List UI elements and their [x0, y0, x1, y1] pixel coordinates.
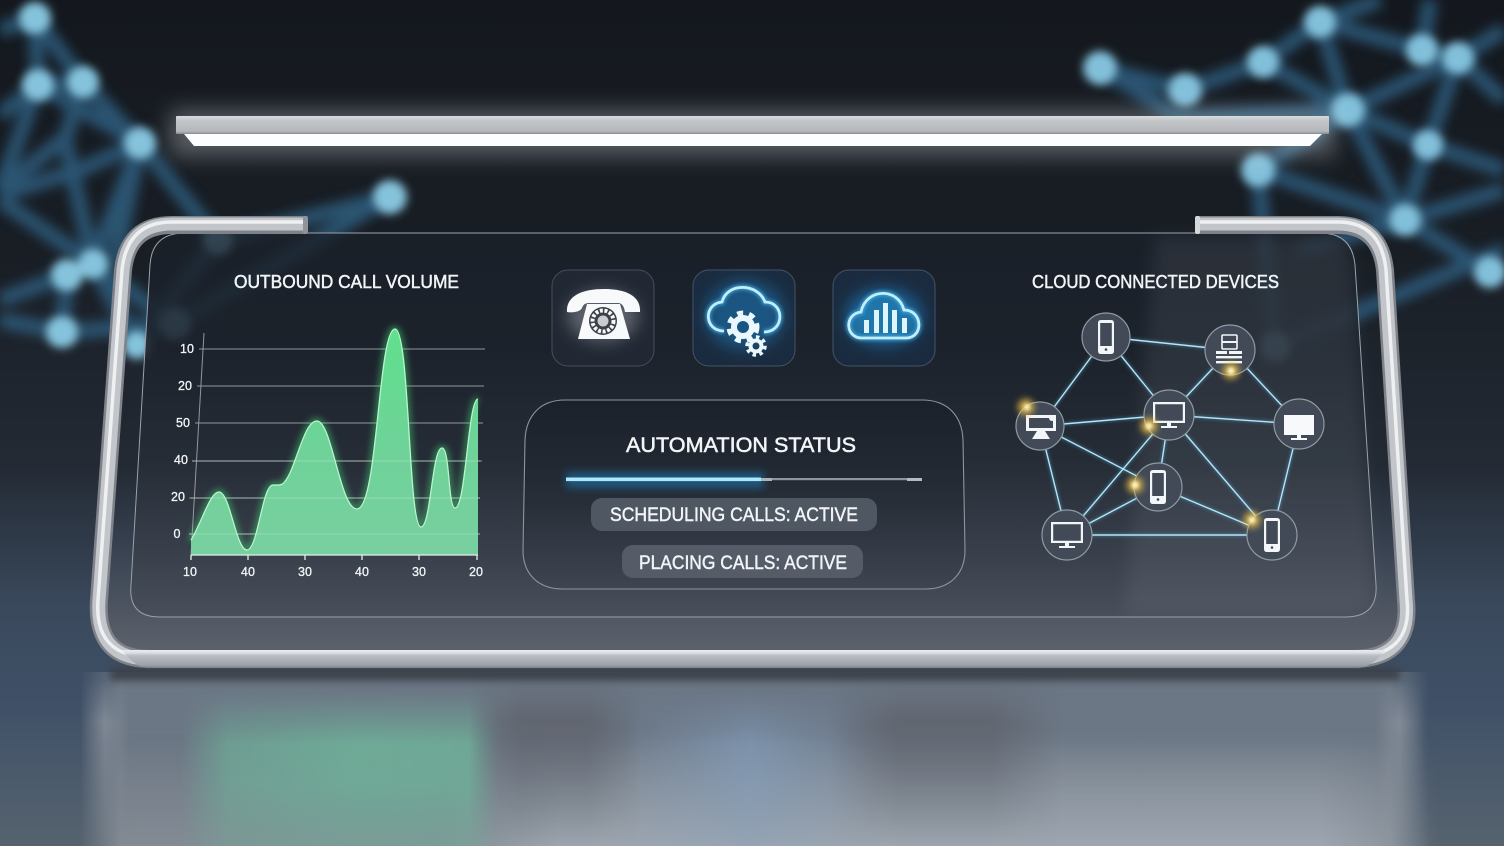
pill: placing calls [622, 545, 863, 578]
heading: cloud connected devices: CLOUD CONNECTED DEVICES [1032, 271, 1279, 292]
network diagram [1016, 313, 1324, 560]
icon tile: cloud gears [693, 270, 795, 366]
icon: monitor E [1284, 415, 1314, 440]
icon: server [1216, 335, 1242, 363]
floor reflection [80, 668, 1440, 846]
pill: scheduling calls [591, 498, 877, 531]
node circles [1016, 313, 1324, 560]
area chart [171, 329, 485, 579]
icon: monitor G [1051, 522, 1083, 548]
icon: phone F [1150, 470, 1166, 504]
heading: automation status: AUTOMATION STATUS [626, 433, 856, 457]
progress bar [566, 472, 922, 488]
x axis labels: 20 [469, 565, 483, 579]
x axis labels: 40 [241, 565, 255, 579]
y axis labels: 50 [176, 416, 190, 430]
y axis labels: 10 [180, 342, 194, 356]
y axis labels: 40 [174, 453, 188, 467]
icon: phone H [1264, 518, 1280, 552]
x axis labels: 40 [355, 565, 369, 579]
icon: phone A [1098, 320, 1114, 354]
y axis labels: 20 [171, 490, 185, 504]
background network left [0, 2, 407, 359]
links [1040, 337, 1299, 535]
panel: automation status [523, 400, 965, 589]
pill: scheduling calls: SCHEDULING CALLS: ACTIVE [610, 505, 858, 526]
yellow sparks [1018, 363, 1260, 528]
icon: desktop [1026, 415, 1056, 439]
light bar [170, 110, 1335, 156]
glass panel [131, 233, 1376, 617]
frame interior [99, 224, 1407, 659]
pill: placing calls: PLACING CALLS: ACTIVE [639, 553, 847, 574]
x axis labels: 30 [298, 565, 312, 579]
glow [191, 329, 478, 550]
heading: outbound call volume: OUTBOUND CALL VOLUME [234, 271, 459, 292]
metal frame [98, 216, 1408, 669]
icon tile: cloud bars [833, 270, 935, 366]
y axis labels: 0 [174, 527, 181, 541]
area [191, 329, 478, 555]
y axis labels [171, 342, 194, 541]
x axis labels: 30 [412, 565, 426, 579]
x axis labels: 10 [183, 565, 197, 579]
icon: monitor D [1153, 402, 1185, 428]
background network right [1083, 0, 1504, 362]
y axis labels: 20 [178, 379, 192, 393]
icon tile: telephone [552, 270, 654, 366]
grid lines [189, 333, 485, 555]
x axis labels [183, 565, 483, 579]
